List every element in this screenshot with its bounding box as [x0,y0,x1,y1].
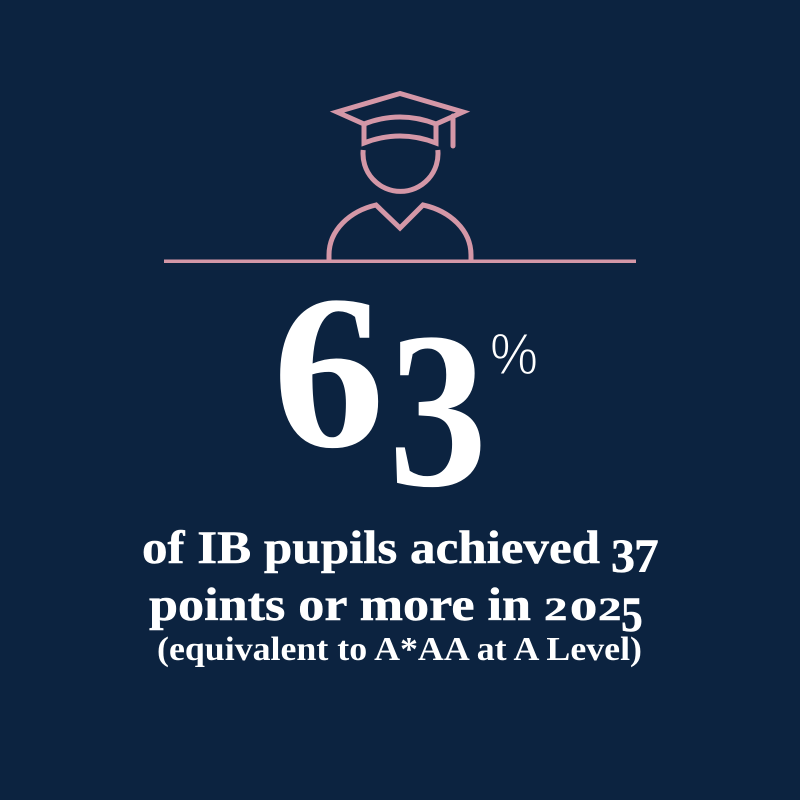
shoulders [329,205,471,261]
description text line 2: 5 [621,587,643,643]
percent sign: % [490,322,538,387]
tassel [450,116,456,146]
big number 63: 6 [272,251,385,495]
big number 63 [272,251,487,534]
description text line 1: 7 [634,530,659,583]
description text line 1 [142,522,659,583]
equivalence note: (equivalent to A*AA at A Level) [157,631,642,668]
mortarboard top [337,94,463,124]
description text line 2: 2 [544,591,567,627]
description text line 2: 0 [570,591,597,627]
description text line 2: points or more in [149,579,531,631]
description text line 2: 2 [598,591,621,627]
big number 63: 3 [388,286,487,534]
cap band [364,124,436,143]
description text line 1: 3 [611,530,635,583]
icon: graduate with mortarboard [329,94,471,261]
head [363,150,438,191]
divider line [164,260,636,263]
description text line 2 [149,579,643,643]
description text line 1: of IB pupils achieved [142,522,600,574]
